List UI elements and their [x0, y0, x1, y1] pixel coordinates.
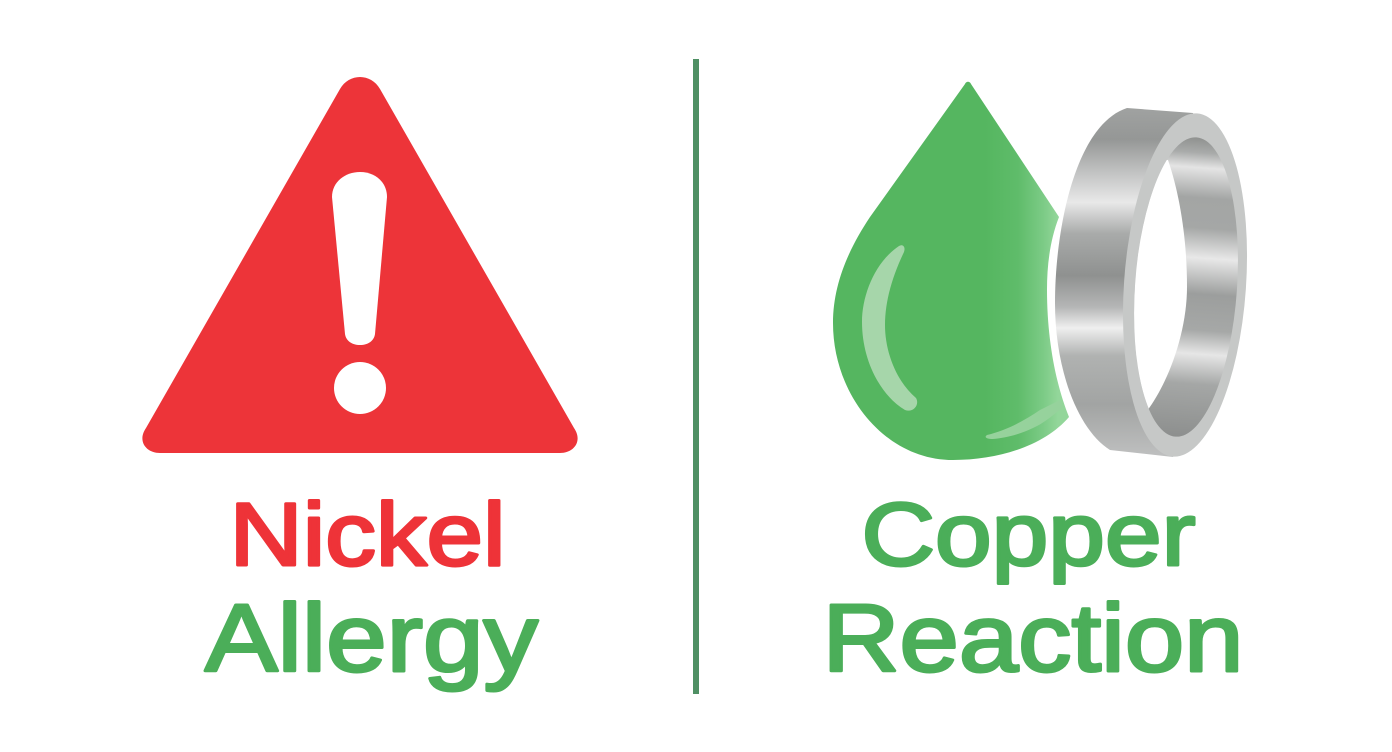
heading: Allergy: Allergy — [205, 585, 538, 692]
icon: metal ring — [1055, 108, 1258, 461]
ring outer band — [1055, 108, 1215, 457]
heading: Nickel: Nickel — [230, 484, 506, 584]
exclamation mark — [332, 172, 387, 414]
ring front face — [1112, 109, 1258, 461]
heading: Reaction: Reaction — [822, 585, 1244, 692]
droplet highlight: lower — [986, 400, 1062, 439]
ring opening — [1134, 160, 1187, 408]
icon: green droplet — [833, 82, 1069, 460]
divider line — [693, 59, 699, 694]
infographic canvas — [142, 59, 1247, 694]
ring inner wall — [1125, 134, 1247, 440]
droplet highlight: left — [862, 245, 917, 411]
icon: red warning triangle — [142, 77, 578, 453]
heading: Copper: Copper — [862, 484, 1196, 584]
